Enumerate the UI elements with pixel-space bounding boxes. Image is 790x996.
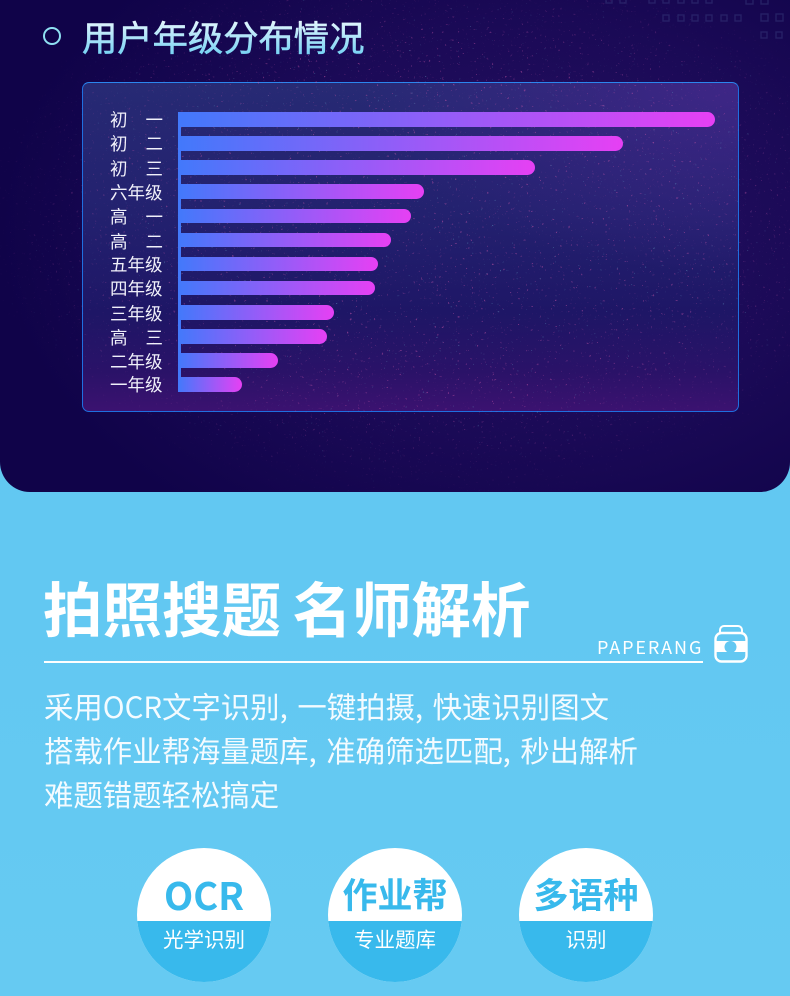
bar chart: grade distribution: 二年级 (110, 349, 162, 374)
text block: description: 搭载作业帮海量题库, 准确筛选匹配, 秒出解析 (44, 729, 638, 771)
panel: bar chart card (82, 82, 739, 412)
bar chart: grade distribution: 三 (146, 325, 163, 350)
bar chart: grade distribution: 三年级 (110, 301, 162, 326)
badge: OCR (137, 848, 271, 982)
icon: camera (714, 625, 748, 663)
bar chart: grade distribution: 二 (146, 229, 163, 254)
badge: OCR: 光学识别 (163, 923, 245, 953)
text block: description (44, 685, 638, 815)
text block: description: 难题错题轻松搞定 (44, 773, 279, 815)
bar chart: grade distribution: 高 (110, 229, 128, 254)
badge: languages: 多语种 (533, 868, 638, 919)
bar chart: grade distribution: 五年级 (110, 252, 162, 277)
bar chart: grade distribution: 二 (146, 131, 163, 156)
bar chart: grade distribution: 一年级 (110, 372, 162, 397)
badge: languages (519, 848, 653, 982)
badge: question bank (328, 848, 462, 982)
bar chart: grade distribution: 高 (110, 325, 128, 350)
heading: photo search: 拍照搜题 名师解析 (43, 564, 531, 650)
bar chart: grade distribution: 初 (110, 131, 128, 156)
badge: OCR: OCR (164, 866, 244, 921)
bar chart: grade distribution: 一 (146, 204, 163, 229)
badge: question bank: 专业题库 (354, 923, 436, 953)
bar chart: grade distribution: 初 (110, 156, 128, 181)
bar chart: grade distribution: 一 (146, 107, 163, 132)
bar chart: grade distribution (110, 107, 715, 397)
brand name: PAPERANG (597, 634, 703, 660)
panel: dark chart section (0, 0, 790, 492)
bar chart: grade distribution: 初 (110, 107, 128, 132)
icon: title ring (43, 27, 61, 45)
badge: question bank: 作业帮 (342, 868, 448, 919)
bar chart: grade distribution: 四年级 (110, 276, 162, 301)
bar chart: grade distribution: 高 (110, 204, 128, 229)
text block: description: 采用OCR文字识别, 一键拍摄, 快速识别图文 (44, 685, 609, 727)
bar chart: grade distribution: 六年级 (110, 180, 162, 205)
badge: languages: 识别 (566, 923, 606, 953)
bar chart: grade distribution: 三 (146, 156, 163, 181)
